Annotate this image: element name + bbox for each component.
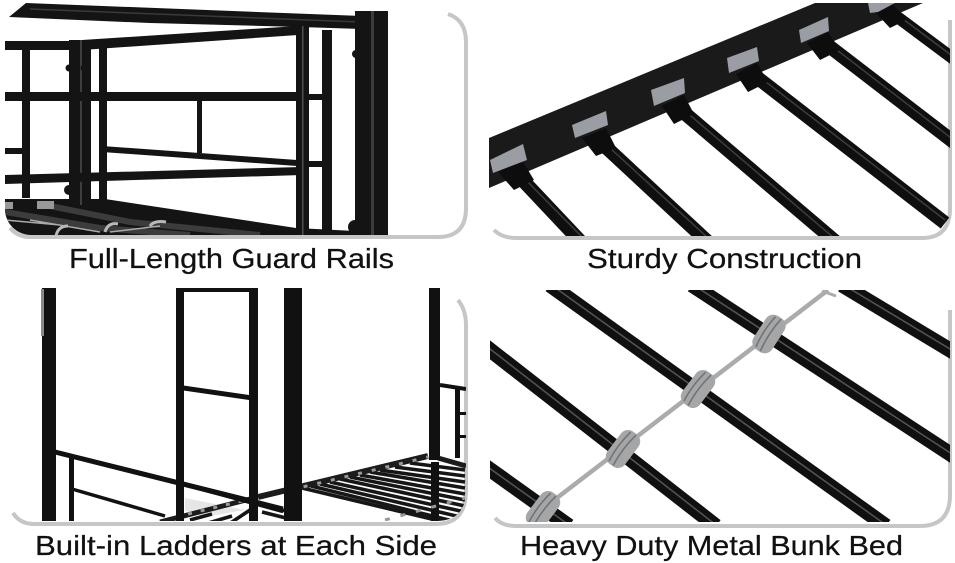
card outline [495,310,950,526]
caption: Built-in Ladders at Each Side [35,530,437,561]
caption: Full-Length Guard Rails [69,243,394,274]
photo: frame and slats [489,3,955,242]
grey floor patch [185,498,245,517]
connector rod [556,290,830,499]
bed frame edges [258,456,428,497]
card outline [13,300,466,524]
slats [515,10,955,242]
clip: 4 [752,314,786,354]
photo: slats and clips [485,284,955,533]
far end rail [440,385,466,389]
ladder [176,288,184,522]
photo: ladder and posts [41,287,466,527]
caption: Sturdy Construction [587,243,862,274]
slats [485,285,955,526]
posts [42,288,56,522]
slat flares [498,3,906,190]
panel: full-length guard rails [5,3,466,274]
guard rails [55,452,283,509]
clip: 1 [526,491,560,522]
clip: 3 [680,370,716,408]
card outline [10,14,466,237]
card outline [494,20,950,238]
caption: Heavy Duty Metal Bunk Bed [520,530,903,561]
mattress slats right [190,463,465,527]
slat highlights [518,10,955,238]
panel: built-in ladders [13,287,466,561]
lower bed leg [431,462,439,522]
photo: guard rail [5,3,388,236]
brackets [490,3,895,173]
clip: 2 [606,430,640,468]
panel: heavy duty metal [485,284,955,561]
slat highlights [485,284,955,525]
frame rail [489,3,923,188]
panel: sturdy construction [489,3,955,274]
